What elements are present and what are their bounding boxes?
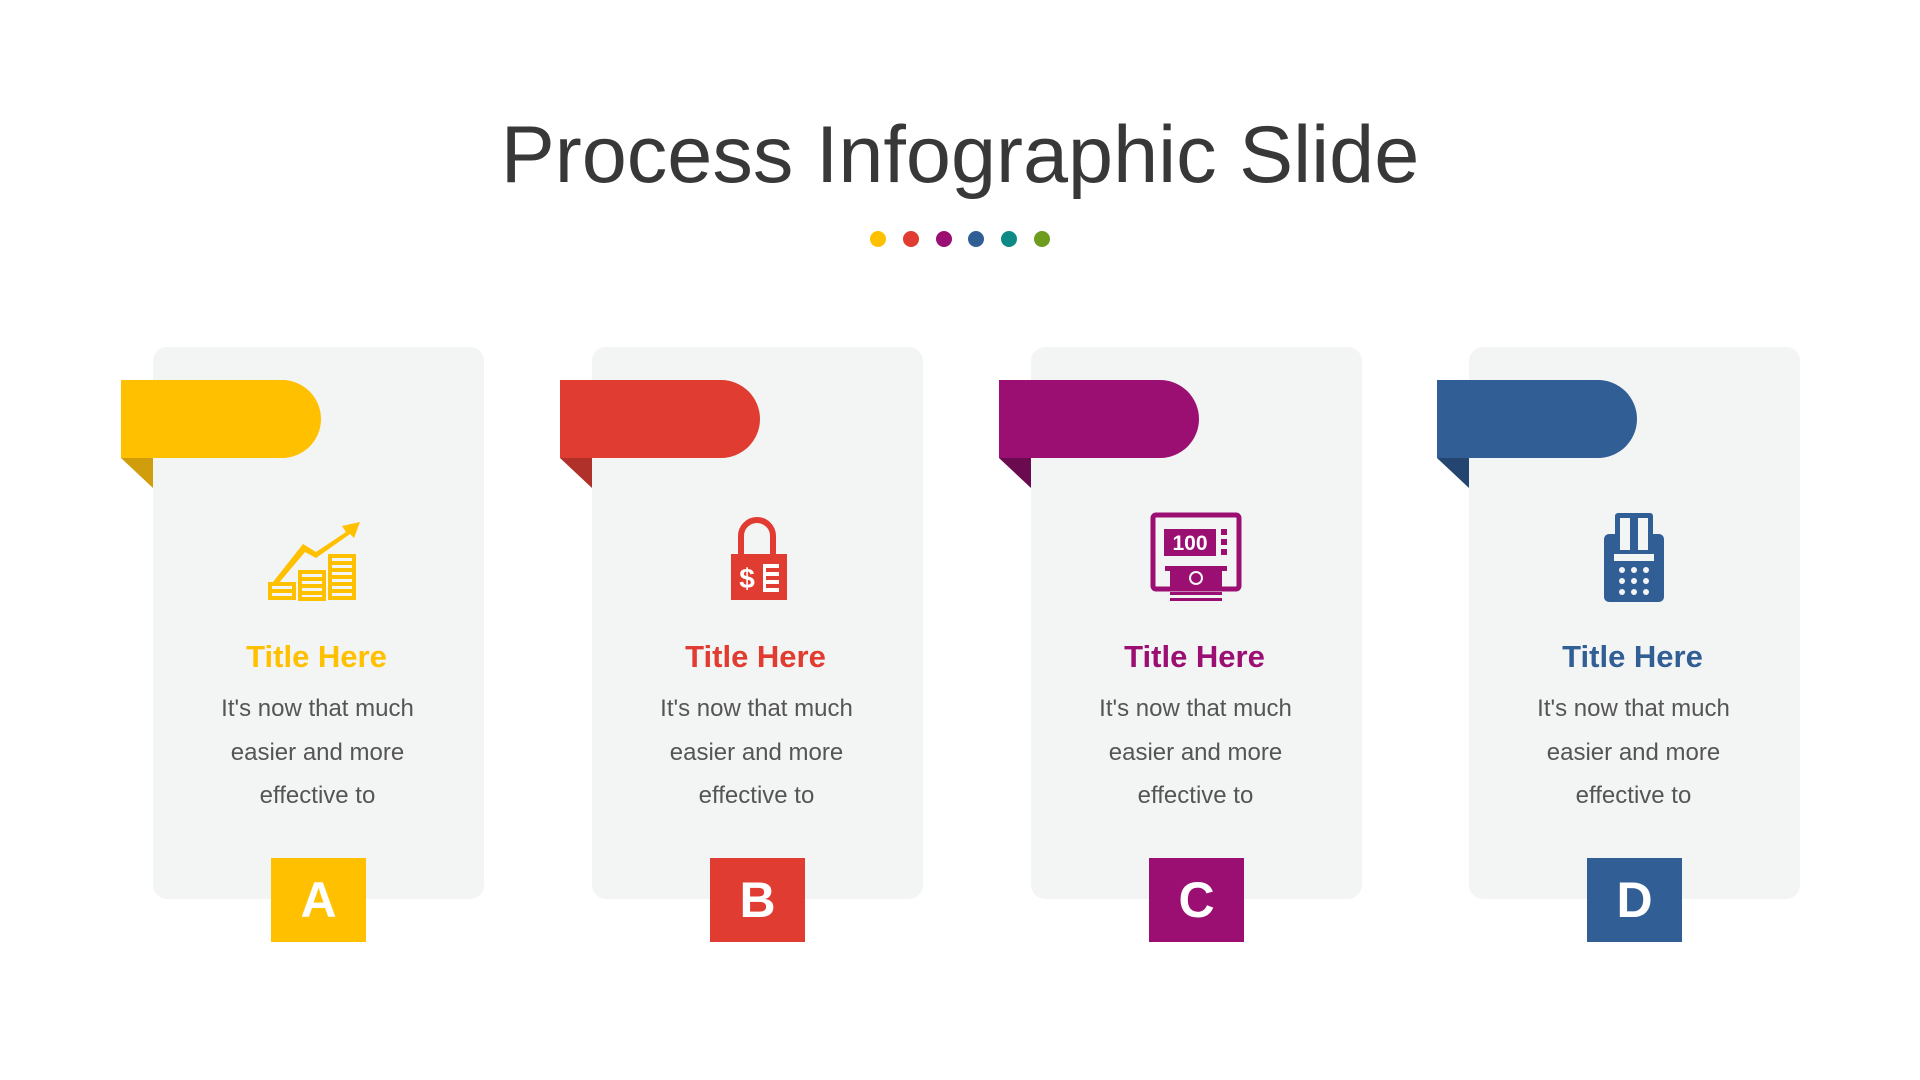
panel: A (153, 347, 484, 899)
card text C: It's now that much (1099, 695, 1292, 722)
letter D (1587, 858, 1682, 942)
ribbon D (1437, 380, 1637, 458)
ribbon A (121, 380, 321, 458)
ribbon B (560, 380, 760, 458)
card text C: easier and more (1109, 738, 1282, 766)
card text D: effective to (1576, 782, 1691, 809)
panel: C (1031, 347, 1362, 899)
icon: lock dollar: $ (739, 563, 755, 594)
card text B: effective to (699, 782, 814, 809)
card text B: It's now that much (660, 695, 853, 722)
panel: D (1469, 347, 1800, 899)
card text A (221, 695, 414, 809)
card text D: It's now that much (1537, 695, 1730, 722)
icon: growth coins (268, 522, 360, 601)
letter C (1149, 858, 1244, 942)
card text C: effective to (1138, 782, 1253, 809)
icon: card terminal (1604, 513, 1664, 602)
card text D (1537, 695, 1730, 809)
card title A: Title Here (246, 639, 387, 674)
letter B (710, 858, 805, 942)
card text D: easier and more (1547, 738, 1720, 766)
card text A: It's now that much (221, 695, 414, 722)
card text C (1099, 695, 1292, 809)
letter A (271, 858, 366, 942)
card text B: easier and more (670, 738, 843, 766)
title: Process Infographic Slide (501, 110, 1419, 200)
letter C: C (1178, 872, 1215, 928)
color dots (870, 231, 1050, 247)
card text A: easier and more (231, 738, 404, 766)
icon: ATM (1150, 512, 1242, 601)
card title B: Title Here (685, 639, 826, 674)
ribbon C (999, 380, 1199, 458)
card text B (660, 695, 853, 809)
icon: lock dollar (731, 517, 787, 600)
letter D: D (1616, 872, 1653, 928)
letter B: B (739, 872, 776, 928)
panel: B (592, 347, 923, 899)
card title D: Title Here (1562, 639, 1703, 674)
icon: ATM: 100 (1172, 532, 1208, 555)
letter A: A (300, 872, 337, 928)
card text A: effective to (260, 782, 375, 809)
card title C: Title Here (1124, 639, 1265, 674)
